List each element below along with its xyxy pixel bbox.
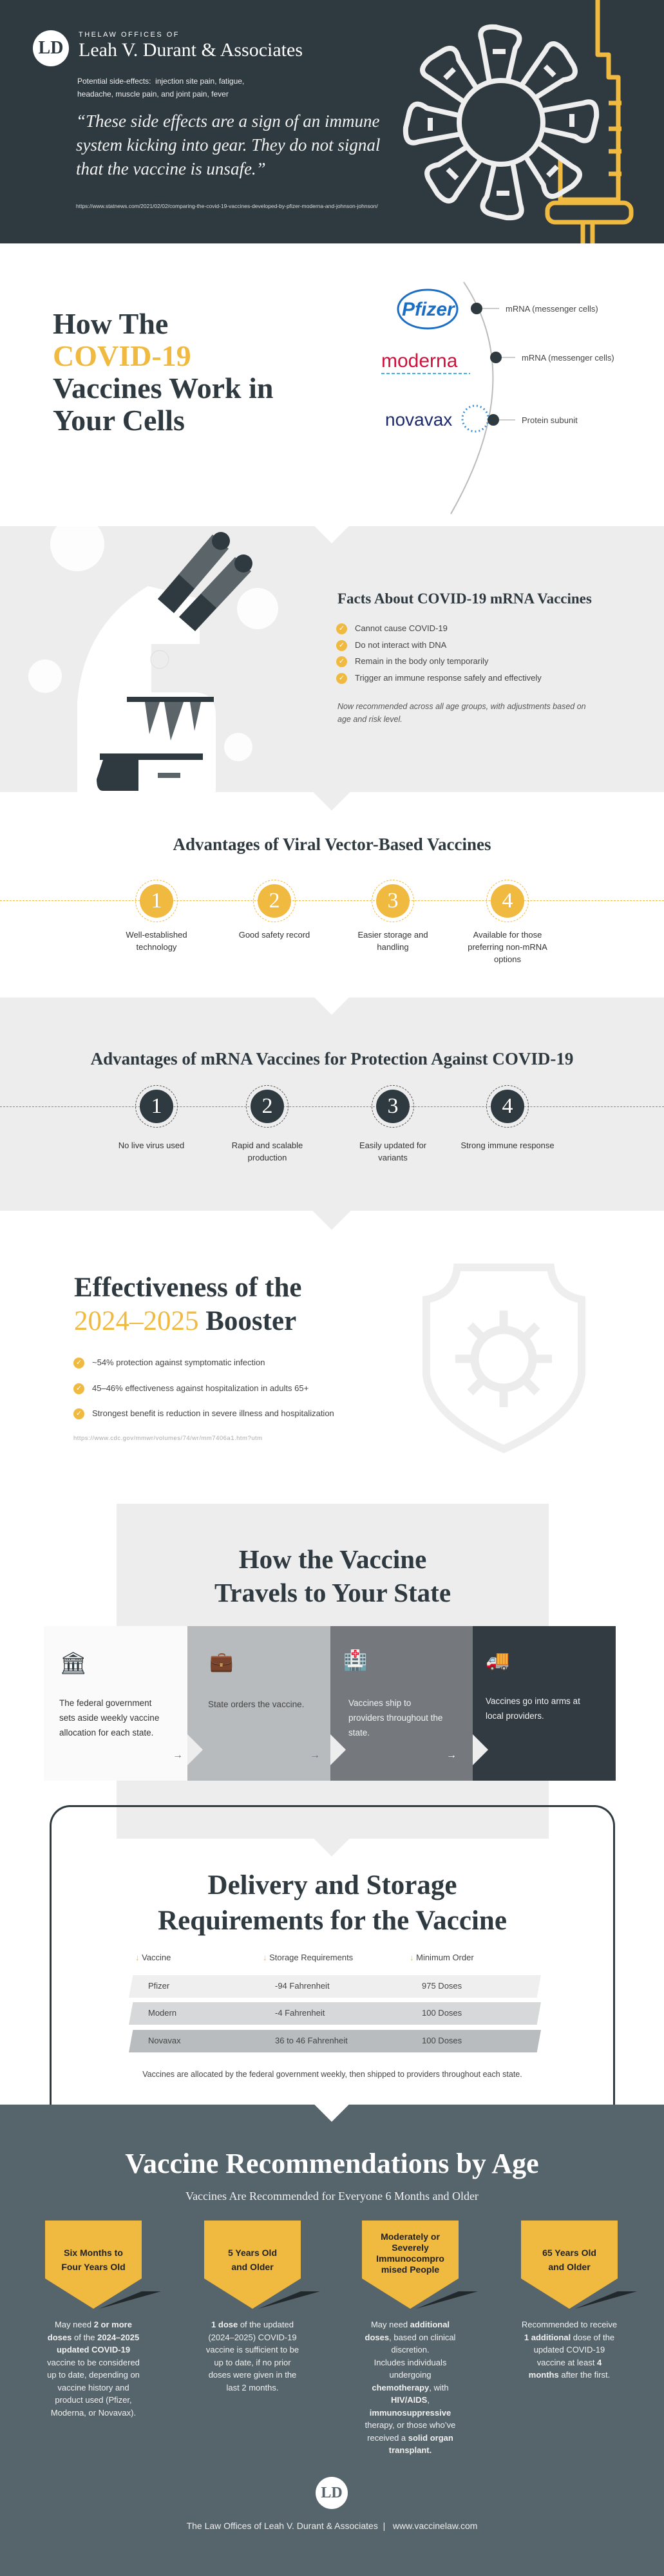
step 4: 🚚: [486, 1650, 509, 1671]
step 2: [187, 1626, 330, 1781]
arc chart with logos: Protein subunit: [522, 415, 578, 425]
labels: [119, 1141, 555, 1162]
step 1: →: [173, 1750, 183, 1761]
age card 4: and Older: [548, 2262, 591, 2272]
facts list: ✓: [339, 641, 345, 649]
triangle connector: [312, 1191, 351, 1230]
step row: [59, 1626, 616, 1781]
arc chart with logos: mRNA (messenger cells): [522, 353, 614, 363]
step 3: [372, 1085, 414, 1128]
table: 36 to 46 Fahrenheit: [275, 2036, 348, 2045]
arc chart with logos: Pfizer: [402, 299, 456, 320]
step 1: 1: [151, 1094, 162, 1118]
step 1: 🏛: [59, 1651, 87, 1676]
table: -94 Fahrenheit: [275, 1981, 330, 1991]
step 2: State orders the vaccine.: [208, 1700, 304, 1709]
table: ↓ Minimum Order: [410, 1953, 474, 1962]
step 3: 3: [388, 1094, 398, 1118]
step 2: 2: [269, 889, 280, 913]
diamond connector: [312, 505, 351, 544]
subtitle: Vaccines Are Recommended for Everyone 6 Months and Older: [185, 2190, 479, 2202]
triangle connector: [312, 2083, 351, 2122]
note: Now recommended across all age groups, with adjustments based on age and risk level.: [337, 702, 586, 724]
age card 1: [45, 2221, 161, 2418]
title: 2024–2025 Booster: [74, 1306, 296, 1336]
arc chart with logos: moderna: [381, 350, 458, 372]
step 4: [486, 1085, 529, 1128]
table: Novavax: [148, 2036, 181, 2045]
step 1: [135, 880, 178, 922]
age card 4: [521, 2221, 637, 2380]
step 1: [135, 1085, 178, 1128]
age card 2: 5 Years Old: [228, 2248, 277, 2258]
arc chart with logos: mRNA (messenger cells): [506, 304, 598, 314]
icon: virus and syringe: [403, 0, 634, 243]
labels: No live virus used: [119, 1141, 184, 1150]
checklist: [73, 1358, 334, 1419]
firm name: Leah V. Durant & Associates: [79, 39, 303, 61]
facts list: [336, 623, 542, 684]
step 1: The federal government sets aside weekly vaccine allocation for each state.: [59, 1698, 159, 1738]
age card 2: 1 dose of the updated (2024–2025) COVID-19 vaccine is sufficient to be up to date, if no prior doses were given in the last 2 months.: [206, 2320, 299, 2392]
source url: https://www.statnews.com/2021/02/02/comparing-the-covid-19-vaccines-developed-by-pfizer-moderna-and-johnson-johnson/: [76, 203, 378, 209]
section: effectiveness: [73, 1264, 585, 1453]
illustration: microscope: [28, 526, 278, 792]
section: how vaccines work: [53, 282, 614, 514]
age card 3: [362, 2221, 478, 2455]
title: How the Vaccine: [239, 1544, 426, 1574]
dashed line: [0, 1106, 664, 1107]
quote: “These side effects are a sign of an immune system kicking into gear. They do not signal that the vaccine is unsafe.”: [76, 111, 380, 178]
arc chart with logos: novavax: [385, 410, 452, 430]
table: [129, 1953, 541, 2052]
section: mRNA advantages gray: [0, 998, 664, 1211]
checklist: ✓: [76, 1359, 82, 1367]
step 3: 🏥: [343, 1650, 367, 1671]
labels: Well-established technology: [126, 930, 187, 952]
section: facts gray: [0, 526, 664, 792]
title: How The: [53, 307, 168, 340]
table: 100 Doses: [422, 2008, 462, 2018]
step 3: 3: [388, 889, 398, 913]
logo: LD: [39, 38, 63, 58]
table: ↓ Vaccine: [135, 1953, 171, 1962]
age card 3: Includes individuals undergoing chemotherapy, with HIV/AIDS, immunosuppressive therapy, or those who’ve received a solid organ transplant.: [365, 2357, 455, 2455]
age card 3: May need additional doses, based on clinical discretion.: [365, 2320, 455, 2354]
triangle connector: [312, 1818, 351, 1857]
facts list: ✓: [339, 658, 345, 665]
step 1: [44, 1626, 187, 1781]
age card 3: Severely: [392, 2242, 429, 2253]
diamond connector: [312, 976, 351, 1015]
facts title: Facts About COVID-19 mRNA Vaccines: [337, 591, 592, 607]
age card 1: Four Years Old: [61, 2262, 126, 2272]
table: Pfizer: [148, 1981, 169, 1991]
labels: Easier storage and handling: [357, 930, 428, 952]
age card 4: 65 Years Old: [542, 2248, 596, 2258]
source: https://www.cdc.gov/mmwr/volumes/74/wr/mm7406a1.htm?utm: [73, 1435, 263, 1442]
title: [158, 1870, 507, 1936]
step 3: →: [446, 1750, 457, 1761]
age card 1: May need 2 or more doses of the 2024–2025 updated COVID-19 vaccine to be considered up to date, depending on vaccine history and product used (Pfizer, Moderna, or Novavax).: [47, 2320, 140, 2418]
step 2: 💼: [209, 1651, 233, 1672]
footer logo: [316, 2477, 348, 2509]
table: 975 Doses: [422, 1981, 462, 1991]
labels: Available for those preferring non-mRNA options: [468, 930, 547, 964]
step 4: 4: [502, 1094, 513, 1118]
facts list: ✓: [339, 674, 345, 682]
checklist: ~54% protection against symptomatic infection: [92, 1358, 265, 1367]
step 2: 2: [261, 1094, 273, 1118]
title: Effectiveness of the: [74, 1273, 301, 1303]
step 4: 4: [502, 889, 513, 913]
table: 100 Doses: [422, 2036, 462, 2045]
dashed line: [0, 900, 664, 901]
age card 3: mised People: [381, 2264, 439, 2275]
labels: Easily updated for variants: [359, 1141, 426, 1162]
title: Advantages of mRNA Vaccines for Protection Against COVID-19: [91, 1049, 573, 1068]
step 2: [253, 880, 296, 922]
footer logo: LD: [321, 2485, 343, 2501]
note: Vaccines are allocated by the federal government weekly, then shipped to providers throughout each state.: [142, 2070, 522, 2079]
facts list: ✓: [339, 625, 345, 632]
facts list: Cannot cause COVID-19: [355, 623, 448, 633]
title: Travels to Your State: [214, 1578, 451, 1607]
step 2: →: [310, 1750, 320, 1761]
checklist: ✓: [76, 1410, 82, 1417]
section: viral vector advantages: [0, 792, 664, 964]
age card 1: Six Months to: [64, 2248, 123, 2258]
labels: Strong immune response: [460, 1141, 555, 1150]
panel: travel to state: [117, 1504, 549, 1839]
table: ↓ Storage Requirements: [263, 1953, 353, 1962]
title: Your Cells: [53, 404, 185, 437]
title: Requirements for the Vaccine: [158, 1906, 507, 1936]
title: Delivery and Storage: [208, 1870, 457, 1900]
triangle connector: [312, 772, 351, 811]
labels: Good safety record: [239, 930, 310, 940]
section: age recommendations: [0, 2105, 664, 2576]
step 3: [372, 880, 414, 922]
facts list: Remain in the body only temporarily: [355, 656, 488, 666]
checklist: ✓: [76, 1385, 82, 1392]
header panel: [0, 0, 664, 243]
labels: Rapid and scalable production: [232, 1141, 303, 1162]
title: COVID-19: [53, 339, 191, 372]
title: Advantages of Viral Vector-Based Vaccines: [173, 835, 491, 854]
title: [214, 1544, 451, 1607]
age card 2: and Older: [231, 2262, 274, 2272]
footer text: The Law Offices of Leah V. Durant & Associates | www.vaccinelaw.com: [187, 2521, 477, 2531]
title: [74, 1273, 301, 1336]
title: [53, 307, 274, 437]
side effects text: [77, 77, 244, 99]
title: Vaccines Work in: [53, 372, 274, 404]
labels: [126, 930, 547, 964]
table: -4 Fahrenheit: [275, 2008, 325, 2018]
checklist: Strongest benefit is reduction in severe illness and hospitalization: [92, 1408, 334, 1418]
step 3: [330, 1626, 473, 1781]
age card 3: Immunocompro: [376, 2253, 444, 2264]
side effects text: Potential side-effects: injection site pain, fatigue,: [77, 77, 244, 86]
step 4: [473, 1626, 616, 1781]
checklist: 45–46% effectiveness against hospitalization in adults 65+: [92, 1383, 308, 1392]
step 2: [246, 1085, 289, 1128]
step 3: Vaccines ship to providers throughout the state.: [348, 1698, 442, 1738]
step 4: [486, 880, 529, 922]
icon: shield: [422, 1264, 585, 1453]
age card 4: Recommended to receive 1 additional dose of the updated COVID-19 vaccine at least 4 months after the first.: [522, 2320, 617, 2380]
step 1: 1: [151, 889, 162, 913]
step 4: Vaccines go into arms at local providers.: [486, 1696, 580, 1721]
firm name: THELAW OFFICES OF: [79, 31, 180, 39]
title: Vaccine Recommendations by Age: [125, 2148, 539, 2179]
table: Modern: [148, 2008, 176, 2018]
age card 2: [204, 2221, 320, 2392]
facts list: Trigger an immune response safely and effectively: [355, 672, 542, 683]
facts list: Do not interact with DNA: [355, 640, 446, 649]
arc chart with logos: [381, 282, 614, 514]
side effects text: headache, muscle pain, and joint pain, fever: [77, 90, 229, 99]
age card 3: Moderately or: [381, 2231, 440, 2242]
logo: [33, 30, 69, 66]
panel: delivery and storage: [50, 1805, 615, 2127]
